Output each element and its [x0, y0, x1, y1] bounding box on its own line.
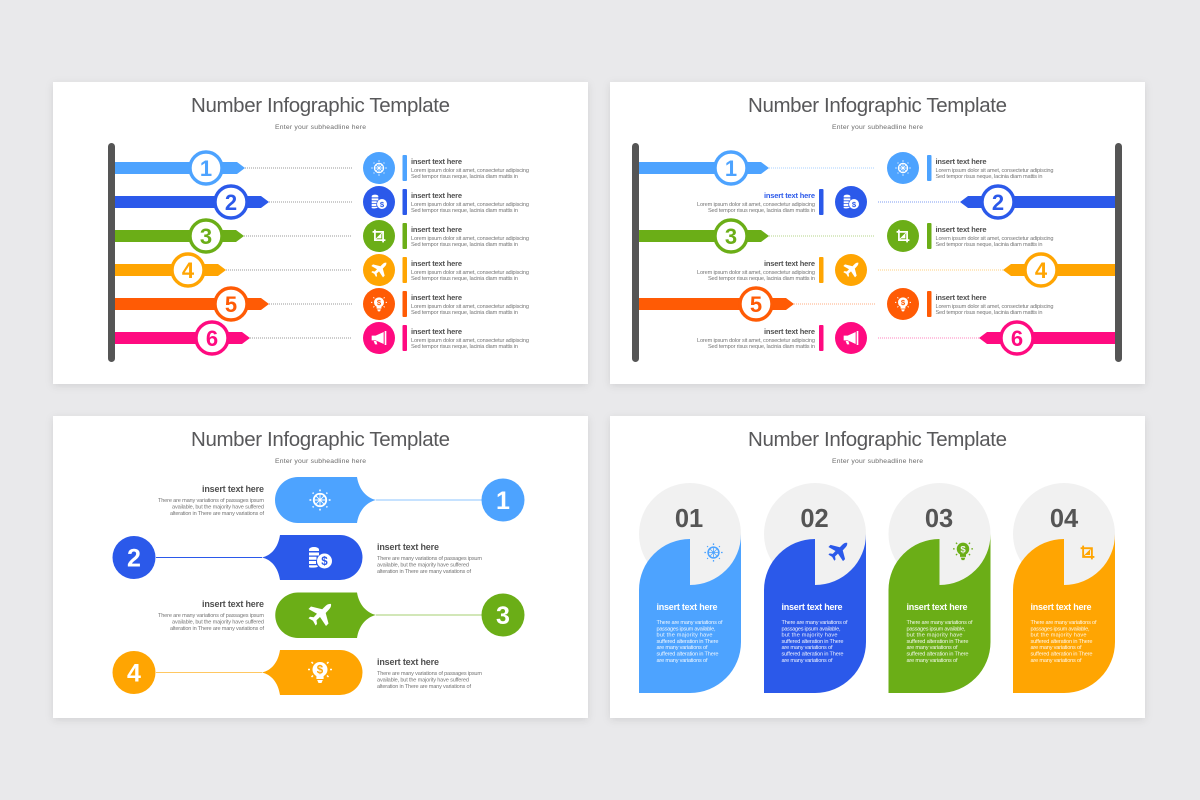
card 01: passages ipsum available,	[656, 626, 716, 632]
item 5	[363, 288, 529, 320]
left axis bar	[632, 143, 639, 362]
card 01: There are many variations of	[656, 620, 723, 626]
item 2	[363, 186, 529, 218]
card 01: are many variations of	[656, 645, 708, 651]
item 4	[697, 254, 867, 286]
card 02: are many variations of	[782, 645, 833, 651]
arrow 2	[115, 186, 352, 218]
arrow 6	[115, 322, 352, 354]
item 2: Lorem ipsum dolor sit amet, consectetur adipiscing	[411, 202, 529, 208]
card 01: suffered alteration in There	[656, 639, 718, 645]
arrow 3	[115, 220, 352, 252]
card 02: passages ipsum available,	[782, 626, 841, 632]
card 03: There are many variations of	[906, 620, 973, 626]
card 01: insert text here	[656, 602, 718, 612]
title: Number Infographic Template	[191, 94, 450, 117]
arrow 2: 2	[225, 190, 237, 215]
card 04: but the majority have	[1030, 633, 1086, 639]
item 2	[697, 186, 867, 218]
row 2: alteration in There are many variations of	[377, 569, 471, 575]
card 02: insert text here	[782, 602, 842, 612]
card 04: are many variations of	[1030, 658, 1082, 664]
arrow 4	[115, 254, 352, 286]
card 03: are many variations of	[906, 658, 958, 664]
row 4: There are many variations of passages ipsum	[377, 671, 482, 677]
item 4: insert text here	[411, 259, 462, 268]
item 6	[363, 322, 529, 354]
card 02: suffered alteration in There	[782, 652, 844, 658]
item 2: Sed tempor risus neque, lacinia diam mattis in	[708, 208, 815, 214]
item 4	[363, 254, 529, 286]
row 3: 3	[496, 602, 510, 630]
item 6: Sed tempor risus neque, lacinia diam mattis in	[411, 344, 518, 350]
arrow 3	[639, 220, 875, 252]
item 1: insert text here	[936, 157, 986, 166]
card 02	[764, 483, 866, 693]
item 3: Sed tempor risus neque, lacinia diam mattis in	[411, 242, 518, 248]
card 02: are many variations of	[782, 658, 833, 664]
row 3: insert text here	[202, 599, 264, 609]
title: Number Infographic Template	[191, 428, 450, 451]
panel: four pill connectors	[53, 416, 588, 718]
arrow 5: 5	[225, 292, 237, 317]
arrow 1	[639, 152, 875, 184]
panel: four numbered cards	[610, 416, 1145, 718]
card 01: but the majority have	[656, 633, 712, 639]
row 4: alteration in There are many variations of	[377, 684, 471, 690]
arrow 1: 1	[200, 156, 212, 181]
row 2: insert text here	[377, 542, 439, 552]
card 02: There are many variations of	[782, 620, 848, 626]
row 4: 4	[127, 660, 141, 688]
arrow 1: 1	[725, 156, 737, 181]
arrow 5: 5	[750, 292, 762, 317]
card 04	[1013, 483, 1115, 693]
item 3: Lorem ipsum dolor sit amet, consectetur adipiscing	[936, 236, 1054, 242]
item 6: insert text here	[764, 327, 815, 336]
row 2	[112, 535, 482, 580]
card 01: suffered alteration in There	[656, 652, 718, 658]
card 01: are many variations of	[656, 658, 708, 664]
card 04: There are many variations of	[1030, 620, 1097, 626]
card 03: insert text here	[906, 602, 968, 612]
subtitle: Enter your subheadline here	[832, 458, 923, 465]
item 4: Lorem ipsum dolor sit amet, consectetur adipiscing	[697, 270, 815, 276]
card 04: 04	[1050, 505, 1079, 533]
card 03: passages ipsum available,	[906, 626, 966, 632]
item 1: Lorem ipsum dolor sit amet, consectetur adipiscing	[936, 168, 1054, 174]
right axis bar	[1115, 143, 1122, 362]
item 1: insert text here	[411, 157, 462, 166]
arrow 1	[115, 152, 352, 184]
row 3: There are many variations of passages ipsum	[158, 613, 264, 619]
item 5: insert text here	[936, 293, 986, 302]
row 1: insert text here	[202, 484, 264, 494]
subtitle: Enter your subheadline here	[832, 124, 923, 131]
card 02: but the majority have	[782, 633, 838, 639]
item 3: Lorem ipsum dolor sit amet, consectetur adipiscing	[411, 236, 529, 242]
item 2: Lorem ipsum dolor sit amet, consectetur adipiscing	[697, 202, 815, 208]
row 1: 1	[496, 487, 510, 515]
card 04: passages ipsum available,	[1030, 626, 1090, 632]
row 4: available, but the majority have suffered	[377, 678, 469, 684]
arrow 5	[115, 288, 352, 320]
item 6	[697, 322, 867, 354]
title: Number Infographic Template	[748, 94, 1007, 117]
item 3: insert text here	[936, 225, 986, 234]
item 3: insert text here	[411, 225, 462, 234]
item 2: insert text here	[764, 191, 815, 200]
card 01: 01	[675, 505, 703, 533]
arrow 2	[878, 186, 1115, 218]
item 6: Lorem ipsum dolor sit amet, consectetur adipiscing	[697, 338, 815, 344]
card 03: suffered alteration in There	[906, 639, 968, 645]
card 04: suffered alteration in There	[1030, 639, 1092, 645]
arrow 6: 6	[206, 326, 218, 351]
row 3	[158, 592, 524, 638]
item 5	[887, 288, 1054, 320]
row 4: insert text here	[377, 657, 439, 667]
card 04: insert text here	[1030, 602, 1092, 612]
arrow 3: 3	[725, 224, 737, 249]
subtitle: Enter your subheadline here	[275, 458, 366, 465]
item 5: Lorem ipsum dolor sit amet, consectetur adipiscing	[936, 304, 1054, 310]
row 3: available, but the majority have suffered	[172, 620, 264, 626]
item 2: Sed tempor risus neque, lacinia diam mattis in	[411, 208, 518, 214]
item 5: insert text here	[411, 293, 462, 302]
row 2: 2	[127, 544, 141, 572]
title: Number Infographic Template	[748, 428, 1007, 451]
card 04: are many variations of	[1030, 645, 1082, 651]
row 3: alteration in There are many variations of	[170, 626, 264, 632]
item 2: insert text here	[411, 191, 462, 200]
card 02: 02	[800, 505, 829, 533]
item 5: Lorem ipsum dolor sit amet, consectetur adipiscing	[411, 304, 529, 310]
item 4: Lorem ipsum dolor sit amet, consectetur adipiscing	[411, 270, 529, 276]
item 5: Sed tempor risus neque, lacinia diam mattis in	[936, 310, 1042, 316]
arrow 5	[639, 288, 875, 320]
card 01	[639, 483, 741, 693]
card 03: 03	[925, 505, 953, 533]
row 1: available, but the majority have suffered	[172, 504, 264, 510]
row 1	[158, 477, 524, 523]
item 4: insert text here	[764, 259, 815, 268]
item 6: Sed tempor risus neque, lacinia diam mattis in	[708, 344, 815, 350]
arrow 4: 4	[1035, 258, 1048, 283]
row 1: There are many variations of passages ipsum	[158, 498, 264, 504]
item 4: Sed tempor risus neque, lacinia diam mattis in	[411, 276, 518, 282]
item 1	[363, 152, 529, 184]
arrow 3: 3	[200, 224, 212, 249]
arrow 6	[878, 322, 1115, 354]
card 03: are many variations of	[906, 645, 958, 651]
item 6: insert text here	[411, 327, 462, 336]
item 5: Sed tempor risus neque, lacinia diam mattis in	[411, 310, 518, 316]
row 2: There are many variations of passages ipsum	[377, 556, 482, 562]
row 4	[112, 650, 482, 695]
arrow 6: 6	[1011, 326, 1023, 351]
card 03: suffered alteration in There	[906, 652, 968, 658]
card 03	[888, 483, 990, 693]
item 1: Sed tempor risus neque, lacinia diam mattis in	[411, 174, 518, 180]
item 3	[363, 220, 529, 252]
card 02: suffered alteration in There	[782, 639, 844, 645]
item 4: Sed tempor risus neque, lacinia diam mattis in	[708, 276, 815, 282]
arrow 4	[878, 254, 1115, 286]
card 04: suffered alteration in There	[1030, 652, 1092, 658]
item 3: Sed tempor risus neque, lacinia diam mattis in	[936, 242, 1042, 248]
item 3	[887, 220, 1054, 252]
panel: six numbered arrows, left aligned	[53, 82, 588, 384]
card 03: but the majority have	[906, 633, 962, 639]
row 1: alteration in There are many variations of	[170, 511, 264, 517]
row 2: available, but the majority have suffered	[377, 562, 469, 568]
panel: six numbered arrows, alternating sides	[610, 82, 1145, 384]
item 1: Sed tempor risus neque, lacinia diam mattis in	[936, 174, 1042, 180]
arrow 2: 2	[992, 190, 1004, 215]
subtitle: Enter your subheadline here	[275, 124, 366, 131]
vertical axis bar	[108, 143, 115, 362]
arrow 4: 4	[182, 258, 195, 283]
item 1: Lorem ipsum dolor sit amet, consectetur adipiscing	[411, 168, 529, 174]
item 6: Lorem ipsum dolor sit amet, consectetur adipiscing	[411, 338, 529, 344]
item 1	[887, 152, 1054, 184]
